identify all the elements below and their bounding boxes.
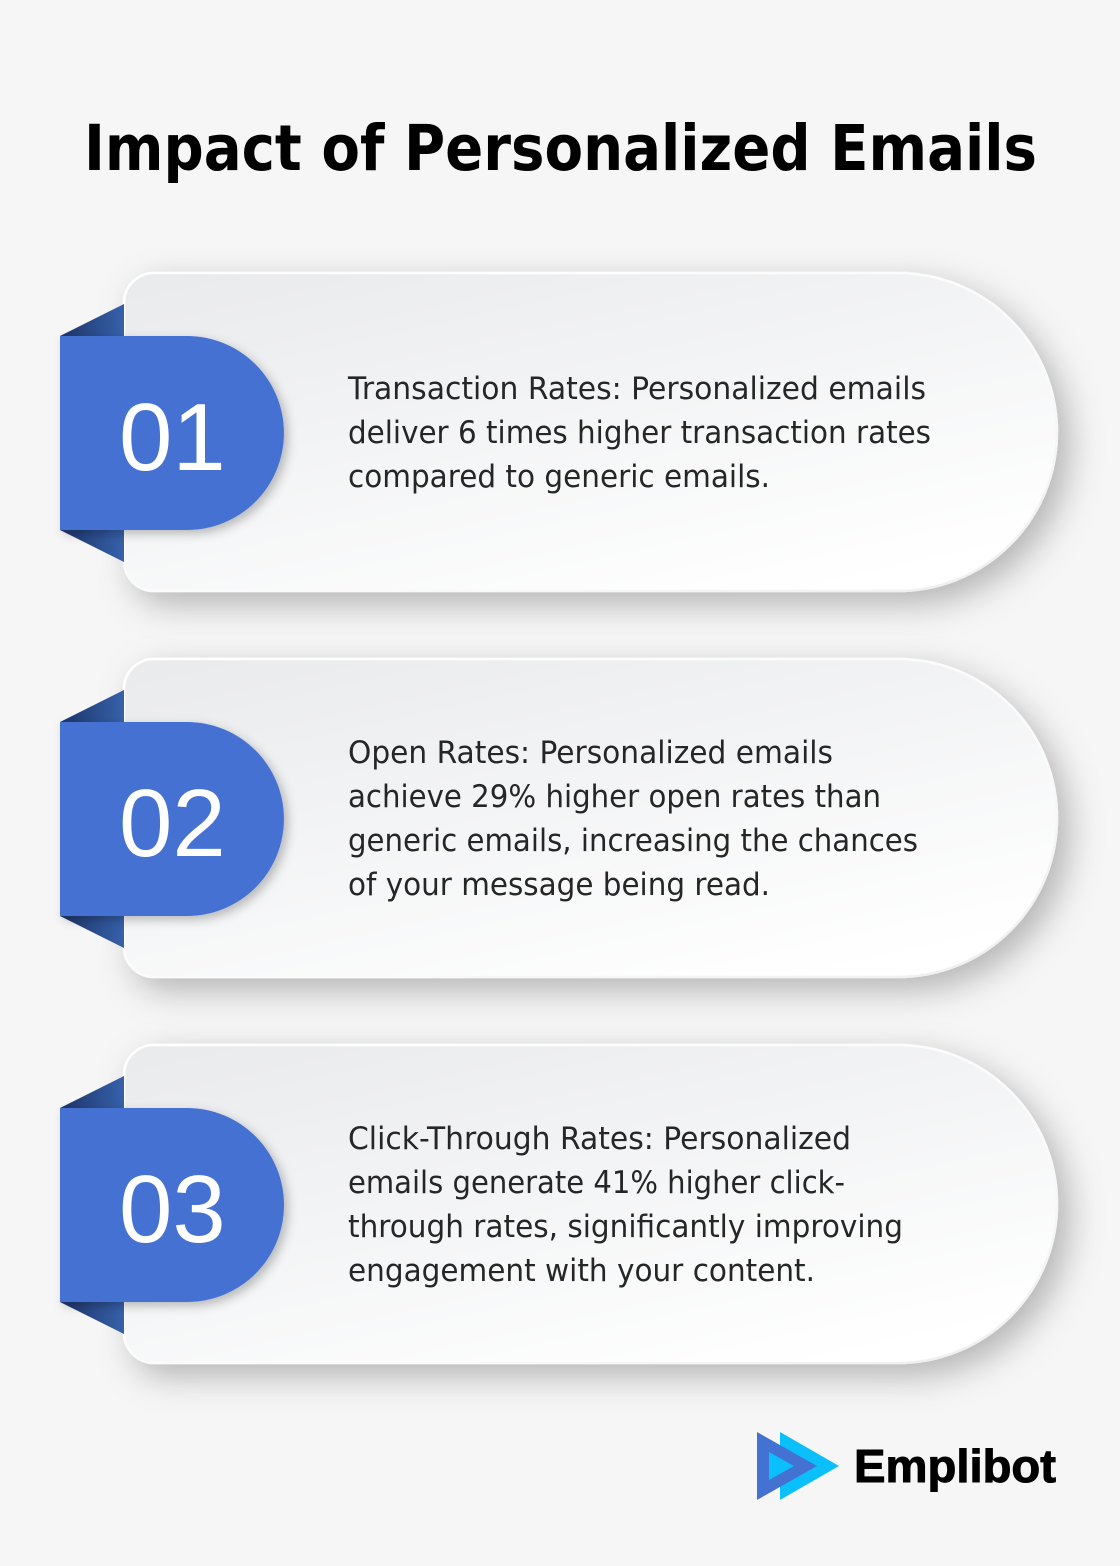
card 3 background [124, 1045, 1057, 1363]
text block 3: through rates, significantly improving [348, 1209, 903, 1245]
card 1 background [124, 273, 1057, 591]
ribbon fold bottom 3 [60, 1302, 124, 1334]
icon: play triangles [757, 1432, 839, 1500]
panel: open rates [60, 659, 1057, 977]
text block 2: Open Rates: Personalized emails [348, 735, 833, 771]
number 03: 03 [119, 1156, 226, 1263]
text block 3: emails generate 41% higher click- [348, 1165, 845, 1201]
text block 2: generic emails, increasing the chances [348, 823, 918, 859]
panel: transaction rates [60, 273, 1057, 591]
ribbon fold top 2 [60, 690, 124, 722]
card 2 background [124, 659, 1057, 977]
wordmark: Emplibot [854, 1440, 1056, 1492]
number badge 3 [60, 1108, 284, 1302]
text block 2: achieve 29% higher open rates than [348, 779, 881, 815]
number badge 2 [60, 722, 284, 916]
logo: Emplibot [757, 1432, 1056, 1500]
text block 1: deliver 6 times higher transaction rates [348, 415, 931, 451]
number badge 1 [60, 336, 284, 530]
text block 2 [348, 735, 918, 903]
ribbon fold top 1 [60, 304, 124, 336]
text block 3: Click-Through Rates: Personalized [348, 1121, 851, 1157]
text block 2: of your message being read. [348, 867, 770, 903]
number 02: 02 [119, 770, 226, 877]
text block 3 [348, 1121, 903, 1289]
ribbon fold top 3 [60, 1076, 124, 1108]
ribbon fold bottom 2 [60, 916, 124, 948]
text block 3: engagement with your content. [348, 1253, 815, 1289]
panel: click-through rates [60, 1045, 1057, 1363]
ribbon fold bottom 1 [60, 530, 124, 562]
number 01: 01 [119, 384, 226, 491]
text block 1: Transaction Rates: Personalized emails [347, 371, 926, 407]
text block 1 [347, 371, 931, 495]
text block 1: compared to generic emails. [348, 459, 770, 495]
